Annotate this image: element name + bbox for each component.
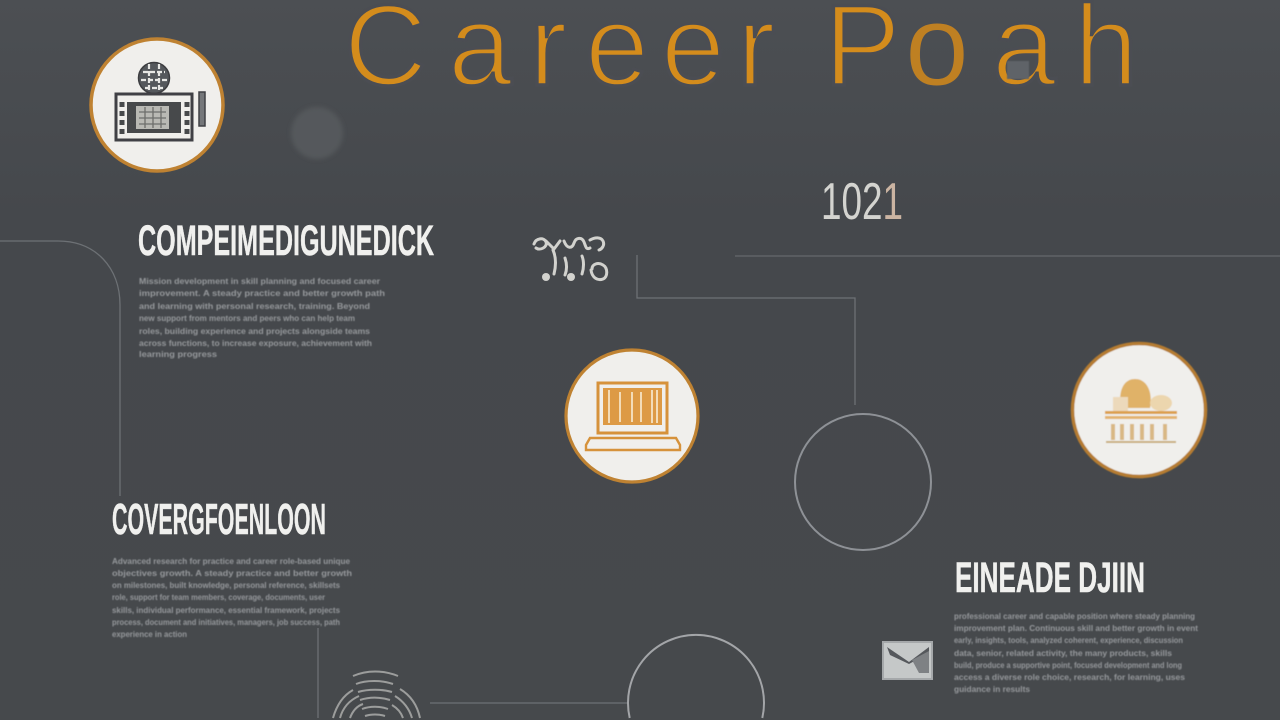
body text: on milestones, built knowledge, personal reference, skillsets bbox=[112, 580, 340, 590]
panel: third career block bbox=[954, 554, 1198, 694]
body text: early, insights, tools, analyzed coherent, experience, discussion bbox=[954, 635, 1183, 645]
connector: top-left curve bbox=[0, 241, 120, 496]
body text: experience in action bbox=[112, 629, 187, 639]
year number: 1021 bbox=[821, 173, 903, 231]
panel: second career block bbox=[112, 495, 352, 639]
body text: roles, building experience and projects alongside teams bbox=[139, 326, 370, 336]
body text bbox=[112, 556, 352, 639]
icon: laptop badge bbox=[566, 350, 698, 482]
connector: lower vertical bbox=[317, 628, 319, 718]
connector: centre elbow bbox=[637, 255, 855, 405]
body text bbox=[954, 611, 1198, 694]
body text: access a diverse role choice, research, for learning, uses bbox=[954, 672, 1185, 682]
body text: across functions, to increase exposure, achievement with bbox=[139, 338, 372, 348]
body text: build, produce a supportive point, focused development and long bbox=[954, 660, 1182, 670]
body text: learning progress bbox=[139, 349, 217, 359]
icon: fingerprint arcs bbox=[333, 672, 420, 718]
body text: data, senior, related activity, the many products, skills bbox=[954, 648, 1172, 658]
connector: bottom rule bbox=[430, 702, 628, 704]
body text: guidance in results bbox=[954, 684, 1030, 694]
body text: improvement plan. Continuous skill and better growth in event bbox=[954, 623, 1198, 633]
body text bbox=[139, 276, 385, 359]
body text: improvement. A steady practice and better growth path bbox=[139, 288, 385, 298]
body text: objectives growth. A steady practice and better growth bbox=[112, 568, 352, 578]
icon: monument badge bbox=[1072, 344, 1206, 476]
body text: Advanced research for practice and career role-based unique bbox=[112, 556, 350, 566]
body text: new support from mentors and peers who can help team bbox=[139, 313, 355, 323]
title bbox=[344, 0, 1138, 110]
connector: top-right rule bbox=[735, 255, 1280, 257]
heading: COMPEIMEDIGUNEDICK bbox=[138, 217, 434, 265]
icon: film projector badge bbox=[91, 39, 223, 171]
circle outline: centre right bbox=[795, 414, 931, 550]
body text: process, document and initiatives, managers, job success, path bbox=[112, 617, 340, 627]
heading: EINEADE DJIIN bbox=[955, 554, 1145, 602]
icon: scribble glyphs bbox=[534, 238, 607, 281]
panel: first career block bbox=[138, 217, 434, 359]
body text: and learning with personal research, training. Beyond bbox=[139, 301, 370, 311]
body text: Mission development in skill planning and focused career bbox=[139, 276, 381, 286]
body text: role, support for team members, coverage, documents, user bbox=[112, 592, 326, 602]
faint circle bbox=[291, 107, 343, 159]
body text: professional career and capable position where steady planning bbox=[954, 611, 1195, 621]
body text: skills, individual performance, essential framework, projects bbox=[112, 605, 340, 615]
icon: envelope bbox=[883, 642, 932, 679]
panel: second career block: COVERGFOENLOON bbox=[112, 495, 326, 544]
circle outline: bottom bbox=[628, 635, 764, 718]
